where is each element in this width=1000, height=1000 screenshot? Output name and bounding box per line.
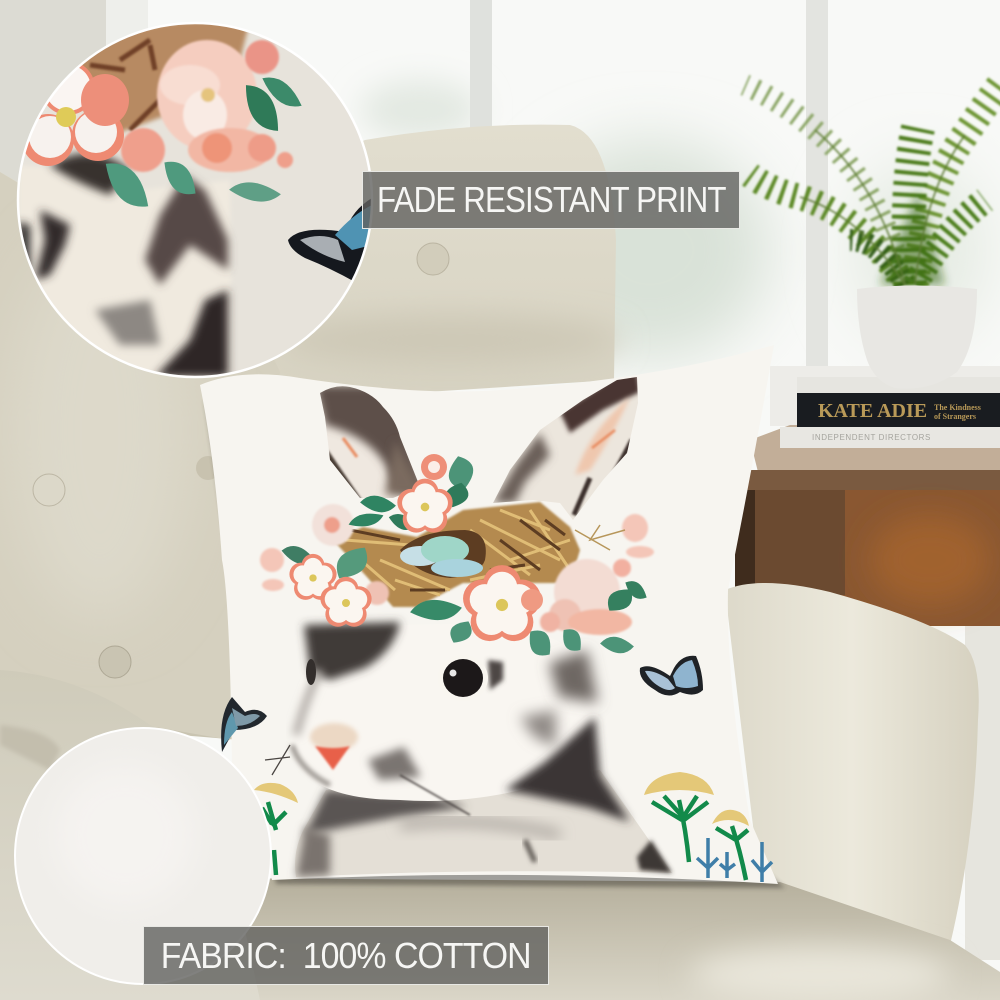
- butterfly left: [221, 697, 267, 752]
- label: fabric 100% cotton: FABRIC: 100% COTTON: [161, 935, 531, 976]
- plant fronds: [745, 85, 1000, 285]
- nest close-up: [82, 24, 250, 134]
- armchair seat: [200, 878, 1000, 1000]
- stack of books: [780, 377, 1000, 448]
- floral wreath: [260, 454, 654, 662]
- stack of books: KATE ADIE: [818, 400, 927, 422]
- embroidered flowers: [254, 772, 772, 882]
- stitched flower: [22, 61, 129, 166]
- close-up butterfly: [288, 198, 372, 282]
- left ear: [320, 386, 418, 498]
- armchair back: [0, 125, 620, 740]
- detail circle: fabric close-up: [15, 728, 271, 984]
- stack of books: INDEPENDENT DIRECTORS: [812, 433, 931, 442]
- armchair left arm: [0, 670, 260, 1000]
- stack of books: of Strangers: [934, 412, 976, 421]
- label: fade resistant print: FADE RESISTANT PRINT: [377, 179, 725, 220]
- label: fade resistant print: [362, 171, 740, 229]
- butterfly right: [640, 656, 703, 696]
- label: fabric 100% cotton: [143, 926, 549, 985]
- bunny body: [295, 770, 672, 877]
- nest: [333, 502, 580, 607]
- bunny head: [265, 622, 630, 822]
- plant pot: [857, 286, 977, 389]
- right ear: [490, 372, 640, 525]
- detail circle: print close-up: [18, 20, 372, 377]
- armchair right arm: [725, 583, 979, 945]
- pillow: [200, 345, 785, 888]
- side table: [735, 425, 1000, 626]
- detail circle outline: [18, 23, 372, 377]
- pale blossom: [121, 40, 293, 172]
- stack of books: The Kindness: [934, 403, 981, 412]
